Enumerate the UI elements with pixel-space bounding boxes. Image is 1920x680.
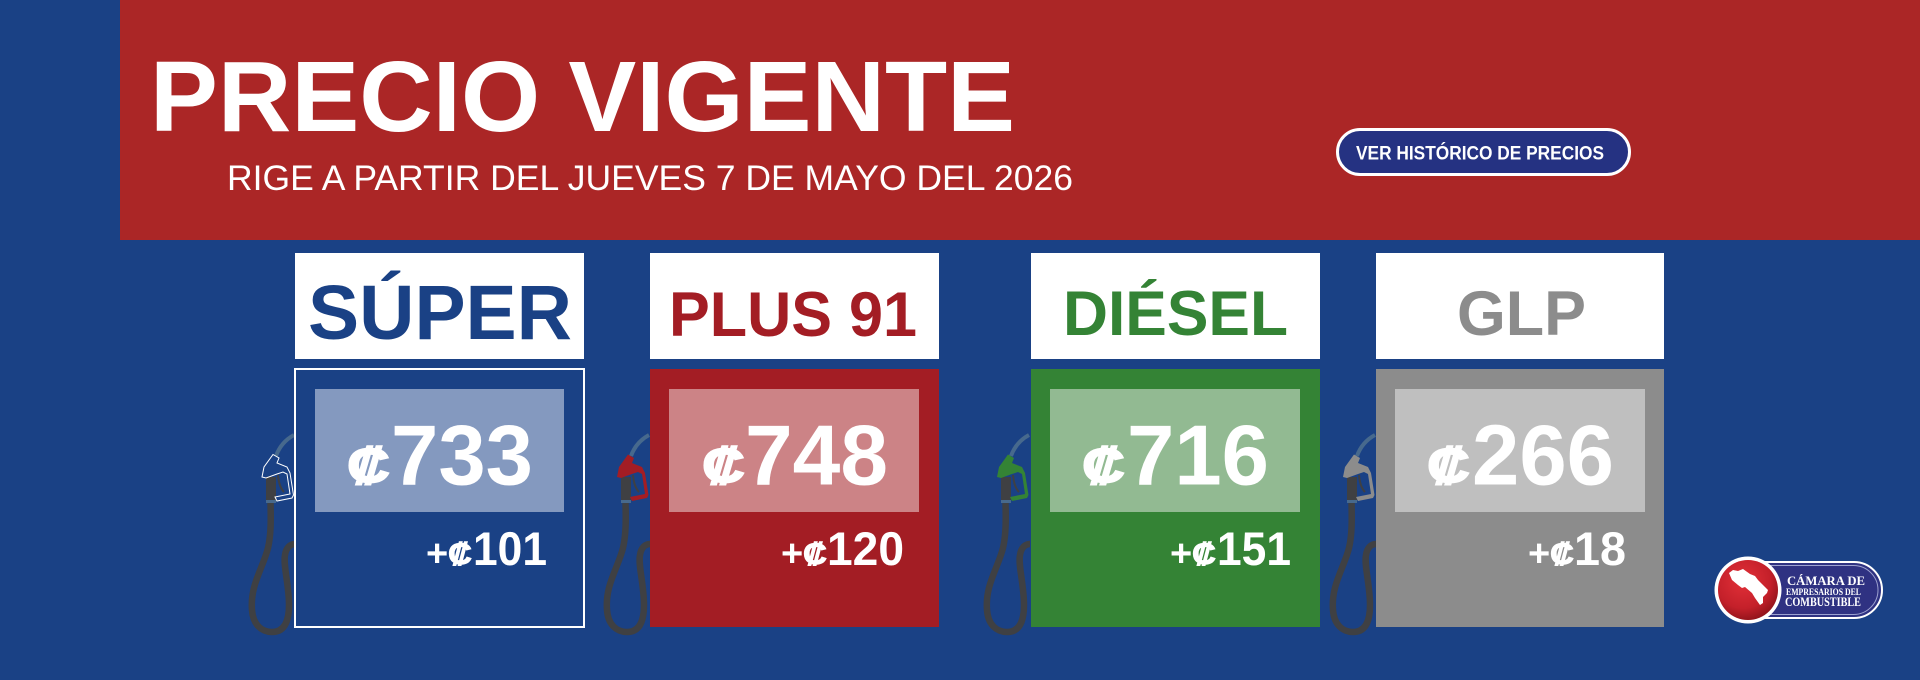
price change: +: [426, 533, 448, 575]
current price: 266: [1472, 408, 1614, 504]
price change: 151: [1217, 522, 1291, 575]
price change: ₡: [803, 538, 827, 571]
fuel name: GLP: [1457, 279, 1586, 349]
price change: [426, 522, 547, 575]
icon: fuel pump nozzle white: [252, 435, 295, 632]
current price: 733: [391, 408, 533, 504]
logo: Cámara de Empresarios del Combustible: EMPRESARIOS DEL: [1786, 588, 1861, 598]
price change: +: [1528, 533, 1550, 575]
price change: +: [1170, 533, 1192, 575]
subtitle: effective date: RIGE A PARTIR DEL JUEVES 7 DE MAYO DEL 2026: [227, 159, 1073, 198]
logo: Cámara de Empresarios del Combustible: CÁMARA DE: [1787, 573, 1865, 588]
price card: [1376, 369, 1664, 627]
panel: header banner: [120, 0, 1920, 240]
fuel name: DIÉSEL: [1063, 279, 1288, 349]
price change: ₡: [1550, 538, 1574, 571]
price card: [295, 369, 584, 627]
price change: [781, 522, 904, 575]
panel: GLP: [1333, 253, 1664, 632]
button: price history: VER HISTÓRICO DE PRECIOS: [1356, 142, 1604, 164]
price change: [1528, 522, 1626, 575]
fuel name: PLUS 91: [669, 280, 917, 350]
price change: ₡: [448, 538, 472, 571]
icon: fuel pump nozzle red: [607, 435, 650, 632]
price change: [1170, 522, 1291, 575]
button: price history: [1338, 130, 1630, 174]
logo: Cámara de Empresarios del Combustible: [1714, 556, 1882, 624]
fuel name: [1031, 253, 1320, 359]
price change: 101: [473, 522, 547, 575]
price change: 18: [1574, 522, 1626, 575]
current price: ₡: [1427, 440, 1470, 493]
panel: Súper: [252, 253, 584, 632]
fuel name: [650, 253, 939, 359]
current price: 748: [745, 408, 888, 504]
icon: fuel pump nozzle green: [987, 435, 1030, 632]
icon: Costa Rica map: [1729, 569, 1768, 605]
fuel name: [1376, 253, 1664, 359]
current price: ₡: [702, 440, 745, 493]
current price: 716: [1127, 408, 1269, 504]
title: PRECIO VIGENTE: [150, 41, 1015, 153]
price change: 120: [827, 522, 904, 575]
panel: Plus 91: [607, 253, 939, 632]
price card: [1031, 369, 1320, 627]
price change: ₡: [1192, 538, 1216, 571]
logo: Cámara de Empresarios del Combustible: COMBUSTIBLE: [1785, 594, 1861, 609]
price change: +: [781, 533, 803, 575]
panel: Diésel: [987, 253, 1320, 632]
icon: fuel pump nozzle grey: [1333, 435, 1376, 632]
current price: ₡: [1082, 440, 1125, 493]
current price: ₡: [347, 440, 390, 493]
fuel name: SÚPER: [308, 270, 572, 356]
price card: [650, 369, 939, 627]
